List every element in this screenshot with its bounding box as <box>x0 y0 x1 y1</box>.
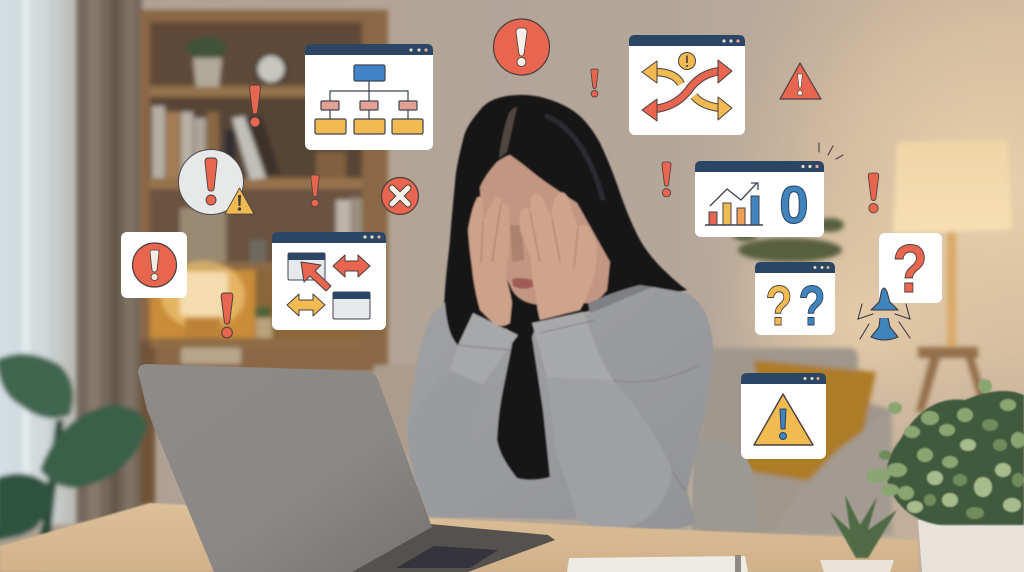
circle: large exclamation <box>494 19 550 75</box>
warning badge <box>225 188 254 214</box>
circle: grey exclamation with warning badge <box>178 150 254 214</box>
shelf decor: clock <box>256 54 286 84</box>
finger lines <box>481 204 578 268</box>
face <box>480 155 610 305</box>
warning triangle <box>754 394 813 445</box>
exclamation mark <box>868 173 879 213</box>
centre hair between arms <box>497 316 550 480</box>
shelf decor: books <box>152 106 165 178</box>
sofa <box>700 348 892 535</box>
bell icon <box>858 288 910 340</box>
hair part highlight <box>499 107 517 158</box>
window panel: bar chart and zero <box>695 161 824 237</box>
left plant <box>0 354 148 540</box>
exclamation mark <box>591 69 598 97</box>
right cuff <box>532 312 613 380</box>
org chart <box>315 65 423 134</box>
triangle: red warning <box>780 63 821 99</box>
left forearm shading <box>407 370 482 518</box>
left cuff <box>450 313 518 385</box>
blue question mark: ? <box>798 274 826 337</box>
mini bar chart <box>705 183 763 225</box>
cursor arrow <box>301 262 331 291</box>
yellow double arrow <box>287 294 325 316</box>
circle: red X <box>382 178 418 214</box>
window panel: crossing arrows <box>629 35 745 135</box>
card: red question mark <box>879 232 942 307</box>
succulent and pot <box>820 495 897 572</box>
hand left <box>468 197 512 326</box>
window panel: warning triangle <box>741 373 826 459</box>
potted plant right <box>866 379 1024 572</box>
laptop <box>138 364 555 572</box>
sweater fold lines <box>456 320 700 490</box>
woman covering her face <box>407 95 713 532</box>
hand right <box>520 192 597 320</box>
bookshelf <box>140 10 388 505</box>
card: red question mark: ? <box>892 232 928 307</box>
exclamation mark <box>311 175 319 207</box>
desk <box>0 503 918 572</box>
right forearm <box>547 377 672 532</box>
exclamation mark <box>250 85 260 127</box>
window panel: two question marks <box>755 262 835 337</box>
exclamation mark <box>662 162 671 197</box>
red S arrow <box>642 60 732 121</box>
yellow question mark: ? <box>765 274 793 337</box>
warning dot <box>678 52 696 70</box>
mouth <box>512 278 534 289</box>
window panel: hierarchy chart <box>305 44 433 150</box>
nose shadow <box>510 225 524 262</box>
small window top <box>288 253 325 280</box>
exclamation mark <box>221 293 233 338</box>
sweater <box>407 287 713 532</box>
neckline hair shadow <box>588 285 653 313</box>
card: red exclamation circle <box>121 232 187 298</box>
red double arrow <box>333 255 370 277</box>
notebook on desk <box>567 555 748 572</box>
yellow arrows <box>642 61 732 120</box>
floor lamp <box>893 140 1012 412</box>
shelf decor: plant and pot <box>186 37 228 59</box>
background plant behind windows <box>733 218 844 262</box>
small window bottom <box>333 292 370 319</box>
spark lines <box>819 143 843 159</box>
hair back <box>444 95 687 348</box>
chair back <box>692 438 758 530</box>
curtains <box>0 0 142 524</box>
sofa left edge <box>374 365 424 455</box>
window panel: arrows and small windows <box>272 232 386 330</box>
lamp on shelf <box>161 261 245 329</box>
big zero: 0 <box>779 176 809 235</box>
